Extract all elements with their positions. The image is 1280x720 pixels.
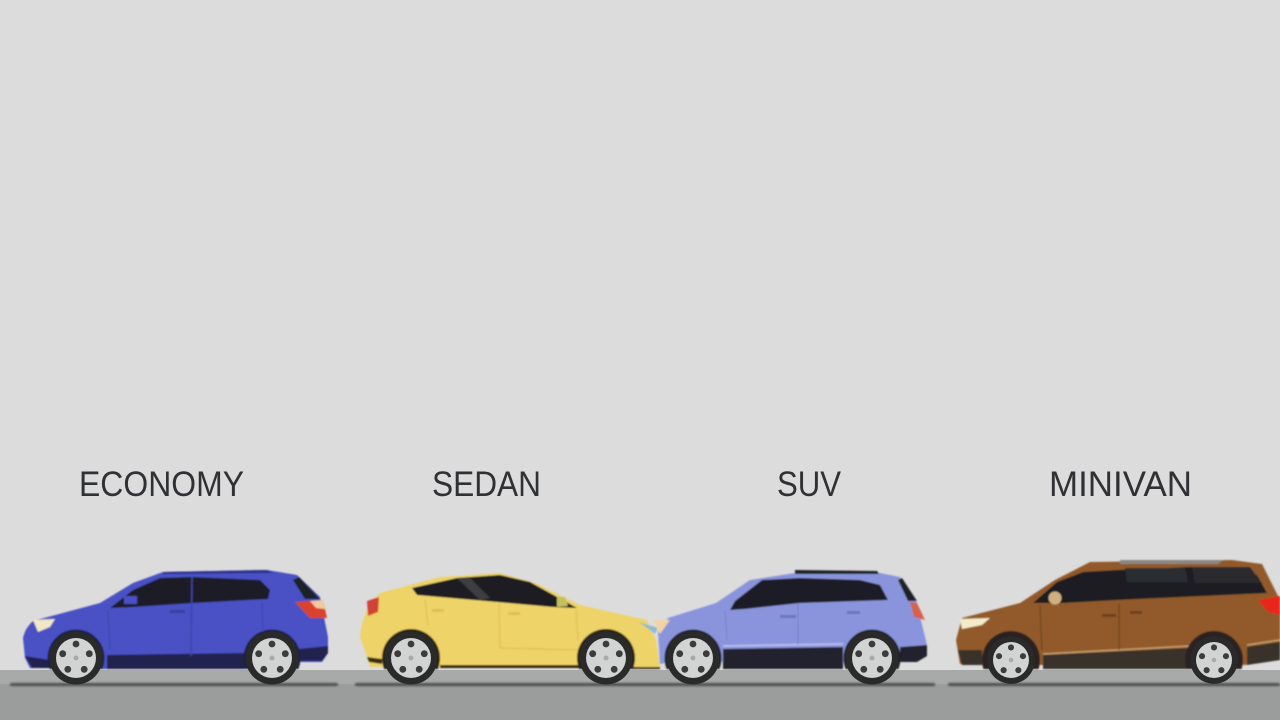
- road: [0, 670, 1280, 720]
- ground shadows: [10, 683, 1280, 686]
- car: SUV (periwinkle): [652, 569, 928, 670]
- label: SEDAN: SEDAN: [432, 465, 541, 504]
- wheels: sedan: [384, 632, 632, 684]
- car: economy (blue): [22, 569, 329, 670]
- label: MINIVAN: MINIVAN: [1049, 465, 1192, 504]
- car: sedan (yellow): [359, 572, 661, 670]
- label: SUV: SUV: [777, 465, 842, 504]
- wheels: economy: [50, 632, 298, 684]
- wheels: minivan: [987, 636, 1238, 684]
- car: minivan (brown): [955, 559, 1280, 670]
- wheels: SUV: [666, 632, 898, 684]
- label: ECONOMY: ECONOMY: [79, 465, 244, 504]
